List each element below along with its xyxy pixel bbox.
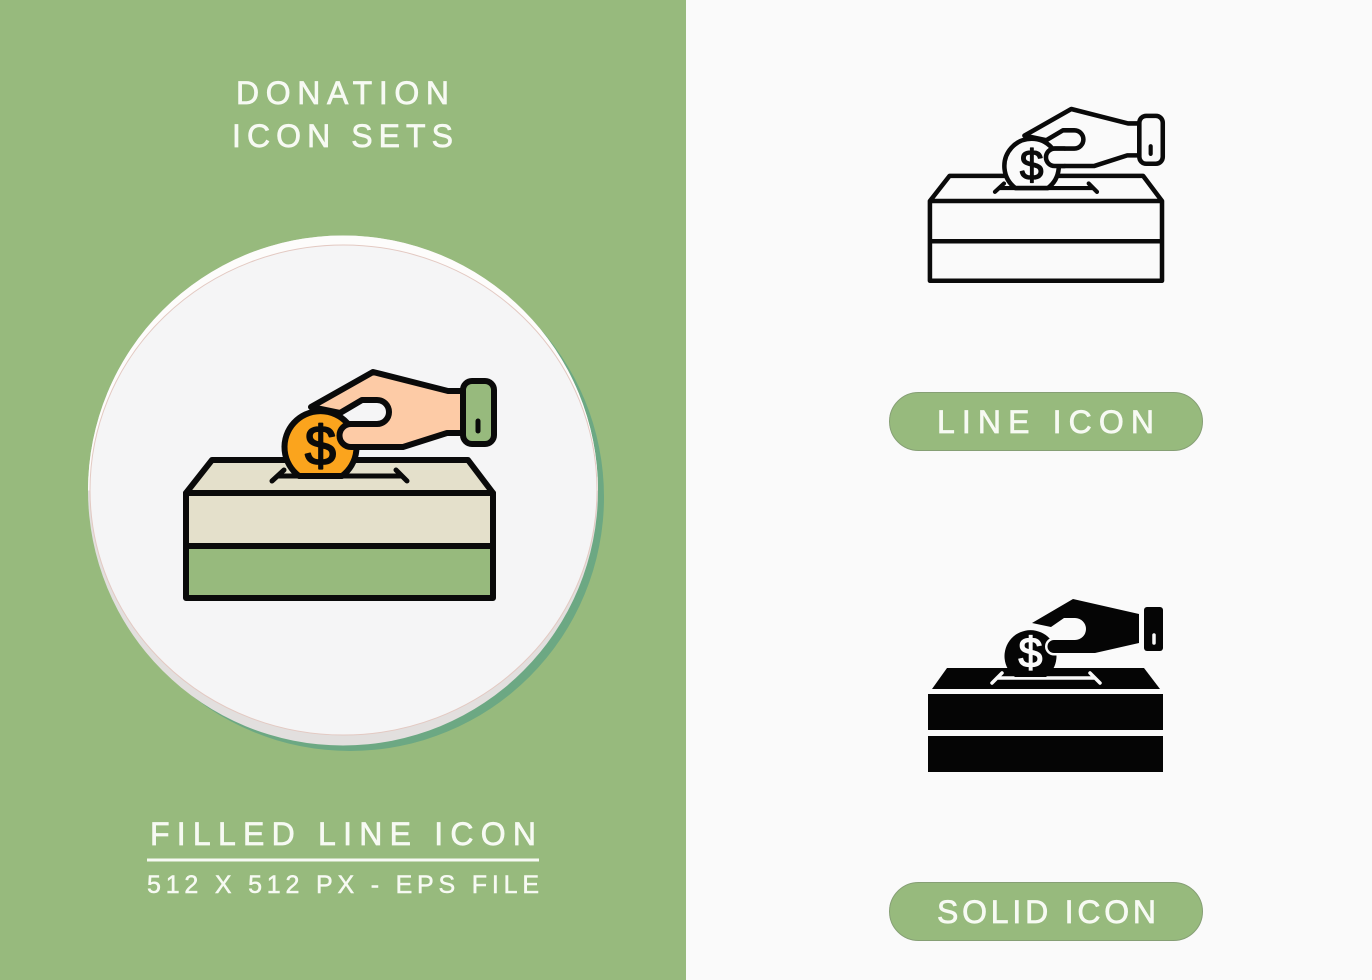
thumb — [340, 424, 364, 447]
icon: solid donation box — [928, 599, 1163, 772]
box lower front — [186, 546, 493, 598]
hand — [311, 372, 463, 447]
caption: filled line icon: FILLED LINE ICON — [150, 816, 536, 852]
coin slot — [992, 673, 1100, 683]
icon: filled line donation box — [186, 372, 494, 598]
pill: line icon label — [890, 392, 1202, 450]
pill: solid icon label: SOLID ICON — [937, 894, 1156, 930]
dollar sign: $ — [1019, 629, 1043, 677]
pill: solid icon label — [890, 882, 1202, 940]
cuff — [1139, 116, 1163, 164]
cuff — [463, 381, 494, 444]
box upper front — [186, 493, 493, 546]
pill: line icon label: LINE ICON — [937, 404, 1154, 440]
dollar sign: $ — [305, 414, 336, 477]
thumb — [1046, 149, 1064, 166]
caption: filled line icon — [147, 816, 539, 899]
circle badge — [88, 236, 604, 751]
icon: line donation box — [930, 109, 1163, 281]
coin — [1004, 139, 1059, 188]
coin slot — [995, 184, 1097, 192]
coin slot — [272, 470, 407, 481]
cuff — [1144, 607, 1163, 651]
panel: green left panel — [0, 0, 686, 980]
coin — [284, 411, 356, 476]
heading: donation icon sets: DONATION — [236, 75, 449, 111]
heading: donation icon sets: ICON SETS — [232, 118, 453, 154]
caption: filled line icon: 512 X 512 PX - EPS FILE — [147, 871, 539, 899]
coin — [1004, 630, 1056, 677]
heading: donation icon sets — [232, 75, 453, 154]
box upper front — [928, 694, 1163, 730]
dollar sign: $ — [1020, 142, 1043, 189]
hand — [1032, 599, 1139, 653]
box lid — [932, 668, 1160, 689]
box lower front — [928, 736, 1163, 772]
box lid — [186, 460, 493, 493]
box outline — [930, 176, 1162, 281]
hand — [1024, 109, 1139, 166]
